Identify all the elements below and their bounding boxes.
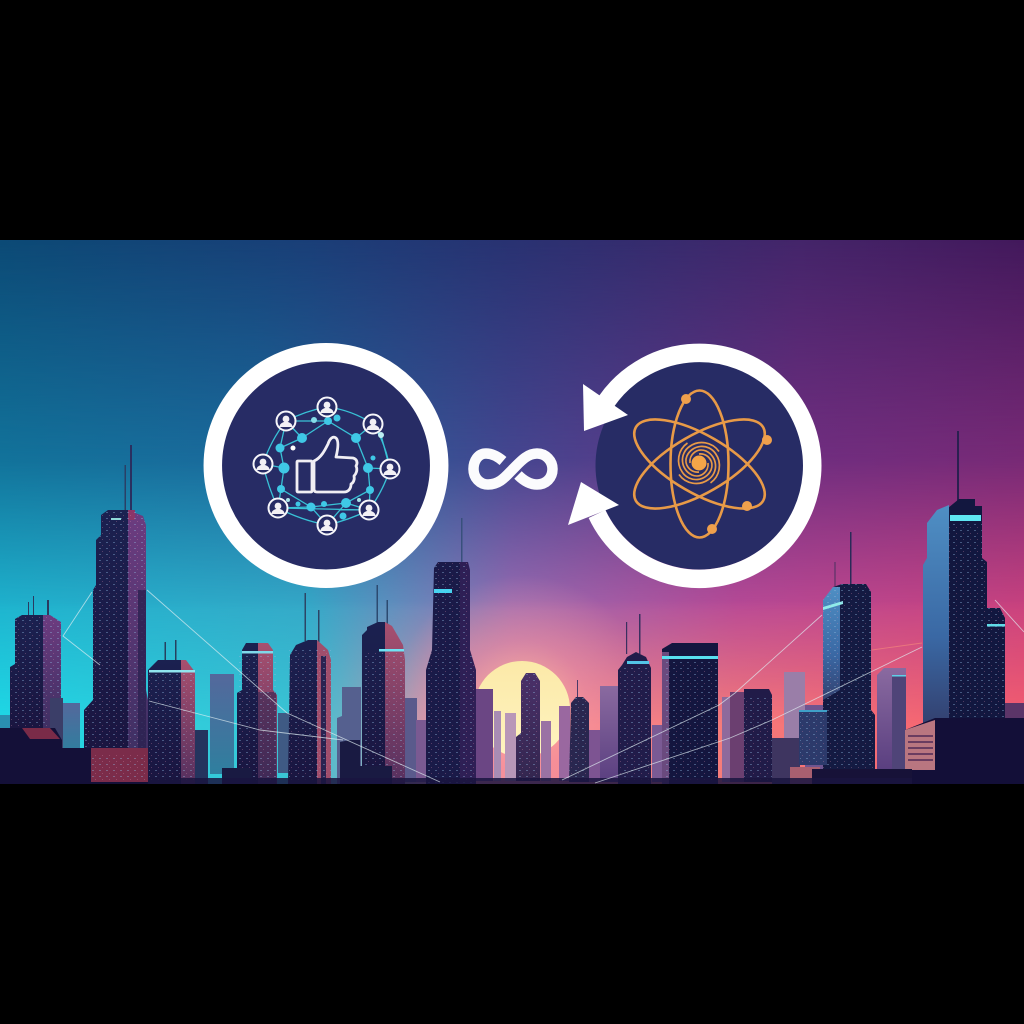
icon: atom orbits: [621, 390, 778, 538]
building: far-left tower: [10, 596, 63, 748]
icon: thumbs up: [297, 437, 357, 492]
building: mauve tower at right: [877, 668, 906, 770]
orbit electrons: [681, 394, 772, 534]
building: foreground block bottom left: [0, 728, 148, 784]
icon: infinity loop: [474, 454, 552, 484]
icon: spiral nucleus: [679, 443, 719, 483]
building: tower in front of the sun: [516, 673, 540, 781]
building: red-faced tower with twin masts: [288, 593, 331, 784]
distant skyline: [0, 672, 1024, 784]
network links: [263, 407, 390, 525]
building: low block beside the tower: [799, 710, 827, 765]
white ring and disc: [213, 352, 439, 579]
building: small tower with mast: [569, 680, 589, 782]
low dark blocks at the street line: [222, 740, 392, 784]
icon: setting sun: [474, 661, 570, 757]
panel: social network circle: [213, 352, 439, 579]
panel: twilight sky gradient: [0, 240, 1024, 784]
user avatars: [254, 398, 400, 534]
arrowhead: lower: [568, 482, 619, 525]
network lines across the skyline: [63, 590, 1024, 783]
building: short block right of centre: [730, 689, 772, 782]
building: foreground block bottom right: [790, 718, 1024, 784]
foreground street strip: [148, 778, 912, 784]
building: tall left skyscraper: [84, 445, 148, 760]
building: twin-mast tower: [618, 614, 651, 784]
building: wide glowing block: [662, 643, 718, 784]
building: mid-left tower: [237, 643, 277, 784]
building: tallest right skyscraper: [923, 431, 1005, 725]
building: central spire tower: [426, 518, 476, 784]
navy disc: [596, 362, 804, 570]
building: teal-banded tower: [148, 640, 195, 784]
network nodes: [276, 414, 384, 520]
panel: atom cycle circle: [568, 353, 812, 579]
arrowhead: upper: [583, 384, 628, 431]
circular arrow ring: [568, 353, 812, 579]
building: blue-faced tower with mast: [823, 532, 875, 782]
building: stepped tower with cyan line: [362, 585, 405, 784]
